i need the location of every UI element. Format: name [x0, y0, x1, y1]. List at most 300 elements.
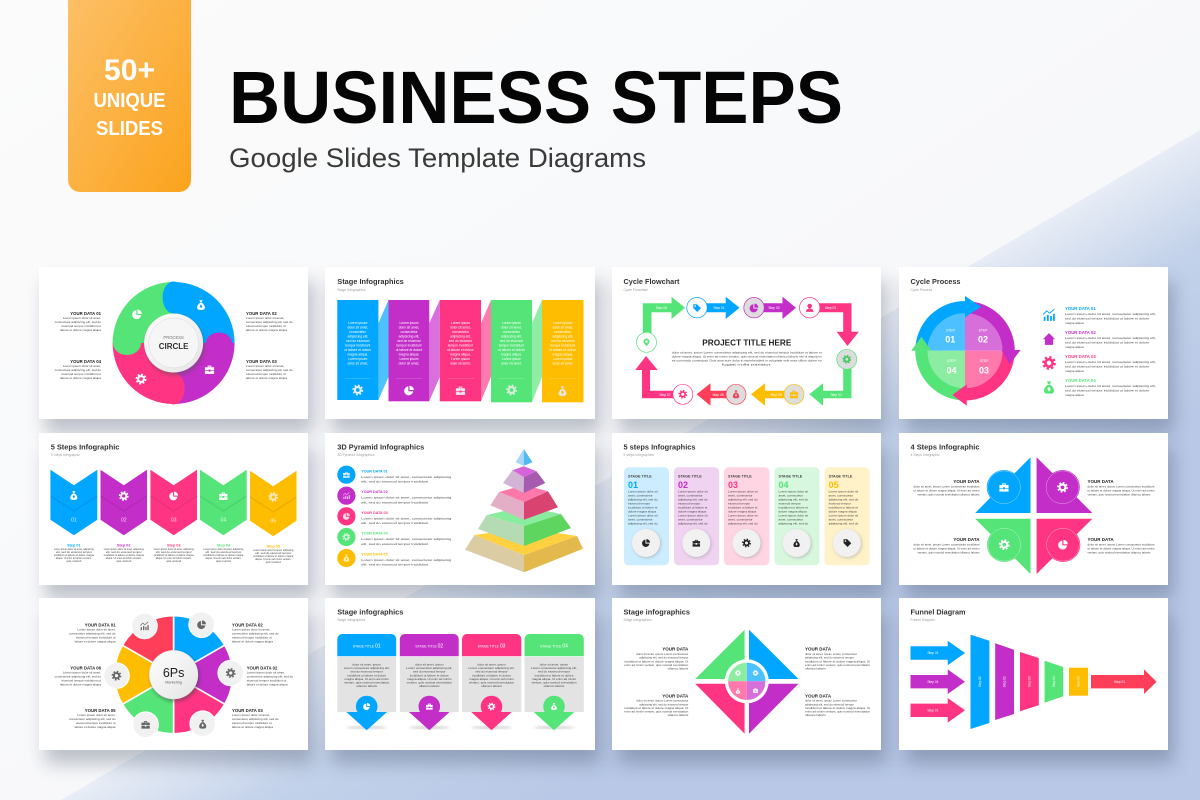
right labels: YOUR DATA 02	[246, 311, 277, 316]
hub: Marketing	[165, 680, 182, 684]
card 4: veniam, quis nostrud exercitation	[531, 680, 577, 684]
card 1: adipiscing elit, sed do	[628, 498, 658, 502]
heading: 5 Steps Infographic	[51, 453, 80, 457]
chevron 3: Lorem ipsum dolor sit amet, adipiscing	[154, 547, 194, 551]
center hub: PROCESS	[163, 335, 184, 340]
wheel	[115, 616, 233, 734]
bar 4: sed do eiusmod	[500, 339, 523, 343]
right labels: consectetur adipiscing elit, sed do	[232, 717, 279, 721]
legend: sed do eiusmod tempor incididunt ut labore et dolore	[1065, 340, 1149, 344]
orange badge: SLIDES	[96, 117, 163, 140]
right text: adipiscing elit, sed do eiusmod tempor	[805, 656, 854, 660]
purple quadrant	[1037, 457, 1092, 513]
heading: Stage infographics	[624, 608, 690, 617]
bar 4: adipiscing elit,	[501, 334, 522, 338]
cycle diagram: STEP	[979, 328, 988, 332]
project title	[672, 338, 822, 366]
bar 4: dolor sit amet,	[501, 362, 522, 366]
bar 1: magna aliqua.	[347, 352, 368, 356]
bar 5: tempor incididunt	[550, 344, 575, 348]
card 2: magna aliqua. Ut enim ad minim	[407, 677, 452, 681]
legend: magna aliqua.	[1065, 321, 1085, 325]
card 5: 05	[829, 480, 839, 490]
bar 2	[388, 300, 429, 401]
right labels: eiusmod tempor incididunt ut	[232, 635, 272, 639]
card 3: incididunt ut labore et	[728, 506, 758, 510]
right labels: eiusmod tempor incididunt ut	[232, 721, 272, 725]
card 1: veniam, quis nostrud exercitation	[344, 680, 390, 684]
bar 3: dolor sit amet,	[450, 362, 471, 366]
chevron 1: Step 01	[67, 544, 81, 548]
left labels: consectetur adipiscing elit, sed do	[55, 674, 101, 678]
card 1: adipiscing elit, sed do	[628, 522, 658, 526]
legend: sed do eiusmod tempor incididunt ut labore et dolore	[1065, 364, 1149, 368]
bar 3	[440, 300, 481, 401]
card 4: adipiscing elit, sed do	[778, 498, 808, 502]
bar 2: tempor incididunt	[396, 344, 422, 348]
data list: YOUR DATA 02	[361, 490, 388, 494]
chevron 3: quis nostrud	[166, 559, 181, 563]
card 1: sed do eiusmod tempor	[351, 670, 383, 674]
step labels: Step 02	[768, 306, 780, 310]
data list: elit, sed do eiusmod tempor incididunt	[361, 521, 428, 525]
card 3: amet, consectetur	[728, 494, 753, 498]
legend: YOUR DATA 03	[1065, 354, 1096, 359]
funnel bars: Step 02	[1003, 676, 1007, 687]
main title: BUSINESS STEPS	[229, 56, 843, 139]
step labels: Step 01	[713, 306, 725, 310]
bar 4: Lorem ipsum	[502, 321, 521, 325]
orange badge: 50+	[104, 54, 155, 87]
legend	[1043, 306, 1156, 397]
card 4: STAGE TITLE 04	[540, 644, 568, 650]
left labels: labore et dolore magna aliqua	[60, 376, 101, 380]
left text	[624, 647, 689, 717]
bar 3: Lorem ipsum	[451, 357, 470, 361]
left labels: labore et dolore magna aliqua	[60, 328, 101, 332]
card 1: incididunt ut labore et dolore	[347, 673, 386, 677]
card 3: 03	[728, 480, 738, 490]
center hub: CIRCLE	[159, 342, 189, 351]
bar 1: Lorem ipsum	[348, 321, 368, 325]
card 2: incididunt ut labore et	[678, 506, 708, 510]
card 4: Lorem consectetur adipiscing elit,	[531, 666, 577, 670]
right labels: eiusmod tempor incididunt ut	[246, 372, 286, 376]
data list: Lorem ipsum dolor sit amet, consectetur adipiscing	[361, 516, 452, 520]
right text: enim ad minim veniam, quis nostrud exercitation	[805, 663, 870, 667]
legend: magna aliqua.	[1065, 393, 1085, 397]
card 1: magna aliqua. Ut enim ad minim	[345, 677, 389, 681]
heading: 4 Steps Infographic	[910, 443, 980, 452]
cycle diagram: 01	[945, 334, 955, 344]
right labels: YOUR DATA 02	[247, 665, 278, 670]
card 1: STAGE TITLE	[628, 474, 652, 478]
card 2: STAGE TITLE	[678, 474, 702, 478]
subtitle: Google Slides Template Diagrams	[229, 143, 646, 173]
card 4: dolore magna aliqua	[778, 510, 807, 514]
chevron 3: Step 03	[167, 544, 180, 548]
heading: Stage infographics	[624, 618, 652, 622]
left labels	[55, 622, 116, 729]
card 2: Lorem ipsum dolor sit	[678, 514, 708, 518]
card 3: Lorem consectetur adipiscing elit,	[469, 666, 515, 670]
left text: adipiscing elit, sed do eiusmod tempor	[639, 702, 688, 706]
project title: ea commodo consequat. Duis aute irure dolor in reprehenderit in voluptate velit esse cillum dolore eu	[672, 358, 822, 362]
chevron 4: incididunt ut labore et dolore magna	[203, 553, 244, 557]
chevron 2: quis nostrud	[116, 559, 131, 563]
right text: dolor sit amet, ipsum Lorem consectetur	[805, 699, 857, 703]
card 2: Lorem ipsum dolor sit	[678, 490, 708, 494]
left text: veniam, quis nostrud exercitation ullamco laboris	[918, 492, 980, 496]
bar 3: sed do eiusmod	[449, 339, 472, 343]
data list: YOUR DATA 01	[361, 469, 388, 473]
right text: YOUR DATA	[805, 647, 832, 652]
card 4: Lorem ipsum dolor sit	[778, 490, 808, 494]
heading: 3D Pyramid Infographics	[337, 443, 424, 452]
heading: Cycle Flowchart	[624, 277, 680, 286]
right labels: YOUR DATA 03	[232, 708, 263, 713]
left labels: eiusmod tempor incididunt ut	[61, 372, 101, 376]
heading	[337, 608, 403, 622]
card 4: eiusmod tempor	[778, 502, 801, 506]
data list: Lorem ipsum dolor sit amet, consectetur adipiscing	[361, 558, 452, 562]
card 2: STAGE TITLE 02	[415, 644, 443, 650]
chevron 5: incididunt ut labore et dolore magna	[253, 554, 293, 558]
bar 5: consectetur	[554, 330, 572, 334]
heading	[624, 608, 690, 622]
card 1: Lorem consectetur adipiscing elit,	[344, 666, 390, 670]
bar 1: dolor sit amet,	[347, 362, 368, 366]
bar 1: dolor sit amet,	[347, 326, 368, 330]
heading: Cycle Flowchart	[624, 288, 648, 292]
card 2: dolore magna aliqua	[678, 510, 706, 514]
chevron 3: elit, sed do eiusmod tempor	[156, 550, 192, 554]
card 2: ullamco laboris	[419, 684, 440, 688]
cycle diagram: 04	[946, 366, 957, 376]
bar 5: ut labore et dolore	[550, 348, 576, 352]
bar 5: dolor sit amet,	[552, 326, 573, 330]
funnel bars: Step 04	[1052, 676, 1056, 687]
card 3: adipiscing elit, sed do	[728, 522, 758, 526]
card 3: STAGE TITLE	[728, 474, 752, 478]
right labels: Lorem ipsum dolor sit amet,	[246, 364, 284, 368]
right text	[1088, 479, 1155, 554]
card 1: Lorem ipsum dolor sit	[628, 514, 658, 518]
right labels: labore et dolore magna aliqua	[232, 639, 273, 643]
bar 5: magna aliqua.	[552, 352, 573, 356]
card 5: Lorem ipsum dolor sit	[829, 514, 858, 518]
chevron 2: Lorem ipsum dolor sit amet, adipiscing	[104, 547, 144, 551]
input arrows: Step 01	[927, 680, 939, 684]
card 1: eiusmod tempor	[628, 502, 650, 506]
left labels: consectetur adipiscing elit, sed do	[69, 631, 116, 635]
bar 2: consectetur	[400, 330, 418, 334]
puzzle circle	[113, 282, 235, 404]
heading: Stage Infographics	[337, 277, 404, 286]
heading: Funnel Diagram	[910, 618, 935, 622]
card 2: dolor sit amet, ipsum	[415, 662, 444, 666]
left labels: Lorem ipsum dolor sit amet,	[77, 713, 116, 717]
right labels: eiusmod tempor incididunt ut	[246, 324, 286, 328]
bar 4: consectetur	[503, 330, 521, 334]
card 2: incididunt ut labore et dolore	[410, 673, 449, 677]
project title: dolore magna aliqua. Ut enim ad minim veniam, quis nostrud exercitation ullamco laboris nisi ut aliquip ex	[672, 354, 822, 358]
chevron 2: Step 02	[117, 544, 131, 548]
right labels: eiusmod tempor incididunt ut	[247, 678, 286, 682]
bar 2: adipiscing elit,	[399, 334, 419, 338]
card 2: amet, consectetur	[678, 494, 703, 498]
heading	[51, 443, 119, 457]
left labels: labore et dolore magna aliqua	[75, 725, 116, 729]
project title: dolor sit amet, ipsum Lorem consectetur adipiscing elit, sed do eiusmod tempor incididunt ut labore et	[672, 350, 822, 354]
heading: Cycle Process	[910, 288, 932, 292]
right labels	[232, 622, 293, 729]
heading: Funnel Diagram	[910, 608, 966, 617]
legend: YOUR DATA 04	[1065, 378, 1096, 383]
chevron 1	[50, 470, 97, 563]
card 1: STAGE TITLE 01	[353, 644, 381, 650]
card 5: amet, consectetur	[829, 518, 853, 522]
hub	[149, 650, 200, 702]
card 2: veniam, quis nostrud exercitation	[407, 680, 452, 684]
right labels: labore et dolore magna aliqua	[247, 682, 288, 686]
card 4: incididunt ut labore et dolore	[535, 673, 574, 677]
left labels: labore et dolore magna aliqua	[60, 682, 101, 686]
panel: 5 steps chevrons	[39, 433, 308, 585]
left text: adipiscing elit, sed do eiusmod tempor	[639, 656, 688, 660]
chevron 2: 02	[121, 518, 127, 524]
left labels: eiusmod tempor incididunt ut	[61, 678, 101, 682]
chevron 4: Lorem ipsum dolor sit amet, adipiscing	[203, 547, 244, 551]
right labels: Lorem ipsum dolor sit amet,	[247, 670, 285, 674]
card 5: amet, consectetur	[829, 494, 853, 498]
card 1: dolor sit amet, ipsum	[352, 662, 381, 666]
chevron 1: quis nostrud	[66, 559, 82, 563]
bar 2: Lorem ipsum	[399, 321, 419, 325]
pink quadrant	[1037, 519, 1092, 574]
cycle diagram	[911, 296, 1021, 406]
right text: ut labore et dolore magna aliqua. Ut enim ad minim	[1088, 546, 1155, 550]
orange badge: UNIQUE	[94, 89, 166, 112]
right text: enim ad minim veniam, quis nostrud exercitation	[805, 710, 870, 714]
bar 3: magna aliqua.	[450, 352, 471, 356]
card 1	[624, 467, 669, 565]
card 3: magna aliqua. Ut enim ad minim	[469, 677, 514, 681]
bar 1: consectetur	[349, 330, 367, 334]
data list: Lorem ipsum dolor sit amet, consectetur adipiscing	[361, 475, 452, 479]
right labels: Lorem ipsum dolor sit amet,	[232, 627, 270, 631]
orange badge	[68, 0, 191, 192]
connectors	[378, 300, 542, 402]
bar 5: dolor sit amet,	[552, 362, 573, 366]
card 1: dolore magna aliqua	[628, 510, 656, 514]
step labels: Step 07	[659, 393, 671, 397]
input arrows: Step 01	[927, 708, 939, 712]
right text: incididunt ut labore et dolore magna aliqua. Ut	[805, 659, 870, 663]
icon discs	[104, 612, 244, 738]
chevron 2	[100, 470, 147, 563]
bar 1	[337, 300, 378, 400]
card 1: 01	[628, 480, 638, 490]
left labels: YOUR DATA 01	[85, 622, 116, 627]
legend: Lorem ipsum dolor sit amet, consectetur adipiscing elit,	[1065, 312, 1156, 316]
left text: ullamco laboris	[668, 667, 689, 671]
left text: ullamco laboris	[668, 713, 689, 717]
card 4: amet, consectetur	[778, 494, 803, 498]
chevron 5: 05	[270, 518, 276, 524]
card 3	[724, 467, 769, 565]
card 1	[337, 634, 396, 730]
right text: dolor sit amet, ipsum Lorem consectetur	[805, 652, 857, 656]
data list: elit, sed do eiusmod tempor incididunt	[361, 500, 428, 504]
data list: Lorem ipsum dolor sit amet, consectetur adipiscing	[361, 496, 452, 500]
bar 4: Lorem ipsum	[502, 357, 521, 361]
left text	[914, 479, 980, 554]
input arrows	[910, 641, 965, 723]
chevron 4: elit, sed do eiusmod tempor	[205, 550, 241, 554]
chevron 5: elit, sed do eiusmod tempor	[255, 551, 291, 555]
chevron 4: aliqua. Ut enim ad minim veniam,	[205, 556, 241, 560]
card 3: veniam, quis nostrud exercitation	[469, 680, 514, 684]
panel: 4 steps	[899, 433, 1168, 585]
step labels: Step 08	[656, 306, 667, 310]
bar 4: magna aliqua.	[501, 352, 522, 356]
left text: dolor sit amet, ipsum Lorem consectetur incididunt	[914, 542, 980, 546]
card 3: adipiscing elit, sed do	[728, 498, 758, 502]
left labels: YOUR DATA 04	[70, 359, 102, 364]
right labels: consectetur adipiscing elit, sed do	[246, 368, 293, 372]
project title: fugiat nulla pariatur.	[722, 362, 772, 366]
bar 2: dolor sit amet,	[399, 362, 419, 366]
chevron 3: aliqua. Ut enim ad minim veniam,	[156, 556, 192, 560]
data list	[337, 466, 452, 567]
right labels: consectetur adipiscing elit, sed do	[232, 631, 279, 635]
bar 1: sed do eiusmod	[346, 339, 370, 343]
left labels: Lorem ipsum dolor sit amet,	[63, 670, 101, 674]
right labels: YOUR DATA 03	[246, 359, 277, 364]
chevron 4: quis nostrud	[216, 559, 231, 563]
right labels: Lorem ipsum dolor sit amet,	[232, 713, 270, 717]
diamond	[695, 630, 798, 734]
bar 5	[542, 300, 584, 402]
left text: ut labore et dolore magna aliqua. Ut enim ad minim	[914, 488, 980, 492]
card 5: eiusmod tempor	[829, 502, 851, 506]
card 5: STAGE TITLE	[829, 474, 853, 478]
bar 5: adipiscing elit,	[552, 334, 573, 338]
panel: cycle process	[899, 267, 1168, 419]
legend: magna aliqua.	[1065, 345, 1085, 349]
left labels: YOUR DATA 06	[70, 665, 102, 670]
step labels: Step 03	[825, 306, 836, 310]
heading: Stage Infographics	[337, 288, 366, 292]
right text: dolor sit amet, ipsum Lorem consectetur incididunt	[1088, 542, 1155, 546]
heading	[910, 443, 980, 457]
card 2: sed do eiusmod tempor	[413, 670, 445, 674]
right text: veniam, quis nostrud exercitation ullamco laboris	[1088, 492, 1151, 496]
step labels: Step 06	[712, 393, 724, 397]
chevron 3: 03	[171, 518, 177, 524]
bar 2: Lorem ipsum	[399, 357, 419, 361]
right labels: labore et dolore magna aliqua	[246, 328, 287, 332]
right labels: consectetur adipiscing elit, sed do	[246, 320, 293, 324]
bar 1: adipiscing elit,	[347, 334, 368, 338]
left text: incididunt ut labore et dolore magna aliqua. Ut	[624, 659, 688, 663]
left labels: eiusmod tempor incididunt ut	[76, 721, 116, 725]
chevron 5: Lorem ipsum dolor sit amet, adipiscing	[253, 548, 293, 552]
panel: stage infographics	[325, 267, 595, 419]
left text: YOUR DATA	[662, 647, 689, 652]
data list: YOUR DATA 05	[361, 552, 388, 556]
green quadrant	[975, 519, 1030, 574]
bar 4: ut labore et dolore	[498, 348, 525, 352]
chevron 4: Step 04	[217, 544, 231, 548]
center hub	[144, 314, 205, 376]
card 3: dolore magna aliqua	[728, 510, 756, 514]
arrows	[635, 297, 859, 406]
left labels: consectetur adipiscing elit, sed do	[55, 320, 101, 324]
left text: dolor sit amet, ipsum Lorem consectetur	[636, 699, 688, 703]
left labels: Lorem ipsum dolor sit amet,	[63, 364, 101, 368]
bar 3: consectetur	[452, 330, 470, 334]
chevron 4	[200, 470, 247, 563]
heading: Stage infographics	[337, 608, 403, 617]
card 4: 04	[778, 480, 789, 490]
card 3: Lorem ipsum dolor sit	[728, 514, 758, 518]
right text: YOUR DATA	[1088, 479, 1114, 484]
card 2: 02	[678, 480, 688, 490]
card 4: dolor sit amet, ipsum	[540, 662, 569, 666]
legend: sed do eiusmod tempor incididunt ut labore et dolore	[1065, 316, 1149, 320]
right text	[805, 647, 870, 717]
panel: 6Ps marketing	[39, 598, 308, 750]
left labels: Lorem ipsum dolor sit amet,	[63, 316, 101, 320]
chevron 5: quis nostrud	[266, 560, 281, 564]
chevron 2: incididunt ut labore et dolore magna	[104, 553, 144, 557]
card 4: sed do eiusmod tempor	[538, 670, 570, 674]
left labels: YOUR DATA 05	[85, 708, 116, 713]
heading: Stage infographics	[337, 618, 366, 622]
left text: incididunt ut labore et dolore magna aliqua. Ut	[624, 706, 688, 710]
step nodes	[636, 298, 857, 404]
card 5: Lorem ipsum dolor sit	[829, 490, 858, 494]
legend: Lorem ipsum dolor sit amet, consectetur adipiscing elit,	[1065, 384, 1156, 388]
card 1: amet, consectetur	[628, 494, 653, 498]
heading: 3D Pyramid Infographics	[337, 453, 375, 457]
chevron 3: incididunt ut labore et dolore magna	[154, 553, 194, 557]
bar 3: ut labore et dolore	[447, 348, 474, 352]
card 3: incididunt ut labore et dolore	[472, 673, 511, 677]
heading: 4 Steps Infographic	[910, 453, 940, 457]
card 4	[774, 467, 820, 565]
bar 5: Lorem ipsum	[553, 357, 573, 361]
right text: YOUR DATA	[1088, 537, 1114, 542]
data list: elit, sed do eiusmod tempor incididunt	[361, 480, 428, 484]
right labels	[246, 311, 293, 380]
left text: veniam, quis nostrud exercitation ullamco laboris	[918, 550, 980, 554]
card 3: dolor sit amet, ipsum	[477, 662, 506, 666]
bar 4	[491, 300, 532, 402]
cycle diagram: STEP	[980, 359, 989, 363]
data list: elit, sed do eiusmod tempor incididunt	[361, 563, 428, 567]
chevron 1: elit, sed do eiusmod tempor	[56, 550, 92, 554]
heading	[910, 277, 960, 292]
left labels: consectetur adipiscing elit, sed do	[69, 717, 116, 721]
chevron 5: aliqua. Ut enim ad minim veniam,	[255, 557, 291, 561]
card 4: ullamco laboris	[544, 684, 565, 688]
bar 2: magna aliqua.	[399, 352, 419, 356]
right text: ut labore et dolore magna aliqua. Ut enim ad minim	[1088, 488, 1155, 492]
card 2	[674, 467, 719, 565]
